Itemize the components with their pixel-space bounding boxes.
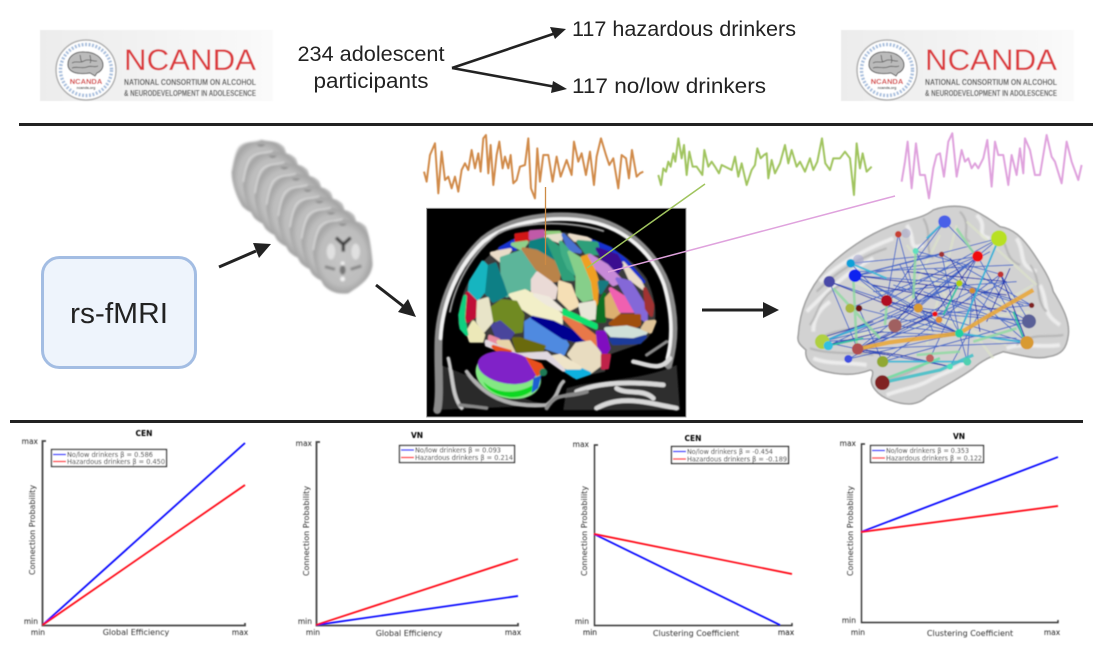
legend: Hazardous drinkers β = 0.450 (67, 458, 165, 466)
legend (400, 446, 514, 462)
MRI background (427, 208, 686, 417)
legend: No/low drinkers β = -0.454 (687, 448, 773, 456)
chart 3: CEN clustering coefficient: min (583, 628, 597, 637)
legend: No/low drinkers β = 0.353 (886, 447, 969, 455)
chart 3: CEN clustering coefficient: Clustering Coefficient (653, 629, 739, 638)
participants text (298, 43, 445, 93)
chart 4: VN clustering coefficient: VN (953, 432, 965, 441)
chart 3: CEN clustering coefficient: max (573, 440, 590, 449)
chart 4: VN clustering coefficient: min (842, 616, 856, 625)
chart 1: CEN global efficiency: Connection Probability (28, 485, 37, 575)
chart 2: VN global efficiency: min (306, 628, 320, 637)
arrow: fMRI to volumes (219, 243, 271, 267)
chart 2: VN global efficiency (296, 431, 522, 638)
time series: orange (424, 135, 643, 198)
legend (52, 450, 166, 466)
head skull outline (435, 216, 680, 410)
network edges (822, 222, 1032, 367)
arrow: volumes to parcellation (376, 285, 416, 317)
chart 3: CEN clustering coefficient: min (575, 617, 589, 626)
group label: no/low drinkers: 117 no/low drinkers (572, 75, 766, 98)
chart 3: CEN clustering coefficient (573, 434, 795, 638)
connector: orange (544, 187, 546, 265)
legend: Hazardous drinkers β = 0.122 (886, 454, 982, 462)
legend: Hazardous drinkers β = 0.214 (415, 454, 514, 462)
legend (870, 446, 984, 462)
fMRI volume stack (232, 140, 373, 294)
connector: pink (608, 196, 895, 272)
gyri shading (807, 212, 1063, 395)
chart 2: VN global efficiency: min (298, 617, 312, 626)
parcellated brain MRI (427, 208, 686, 417)
chart 4: VN clustering coefficient: max (840, 439, 857, 448)
right NCANDA logo (841, 30, 1074, 101)
chart 4: VN clustering coefficient: min (851, 628, 865, 637)
chart 1: CEN global efficiency: max (232, 628, 249, 637)
brain connectome network (798, 206, 1069, 404)
legend (672, 446, 788, 464)
chart 4: VN clustering coefficient: Clustering Coefficient (927, 629, 1013, 638)
chart 1: CEN global efficiency: min (24, 617, 38, 626)
chart 1: CEN global efficiency (22, 429, 249, 637)
cortical parcels (458, 231, 655, 378)
legend: No/low drinkers β = 0.093 (415, 446, 501, 454)
chart 2: VN global efficiency: max (505, 628, 522, 637)
connector: green (587, 184, 705, 268)
brain silhouette (798, 206, 1069, 404)
rs-fMRI box (42, 258, 196, 368)
chart 2: VN global efficiency: VN (411, 431, 423, 440)
legend: No/low drinkers β = 0.586 (67, 451, 154, 459)
arrow: parcellation to network (702, 302, 779, 318)
arrows: split into groups (452, 27, 567, 93)
chart 1: CEN global efficiency: Global Efficiency (103, 628, 170, 637)
group label: hazardous drinkers: 117 hazardous drinkers (572, 18, 796, 41)
legend: Hazardous drinkers β = -0.189 (687, 455, 787, 463)
chart 4: VN clustering coefficient: Connection Probability (846, 486, 855, 576)
translucent overlay fibres (827, 222, 1037, 358)
time series: pink (902, 133, 1082, 198)
chart 2: VN global efficiency: Connection Probability (302, 486, 311, 576)
chart 1: CEN global efficiency: max (22, 437, 39, 446)
time series: green (658, 138, 872, 195)
chart 3: CEN clustering coefficient: max (778, 628, 795, 637)
chart 2: VN global efficiency: Global Efficiency (376, 629, 443, 638)
chart 4: VN clustering coefficient: max (1044, 628, 1061, 637)
network nodes (815, 215, 1036, 390)
participants text: 234 adolescent (298, 43, 445, 66)
chart 1: CEN global efficiency: CEN (136, 429, 152, 438)
chart 4: VN clustering coefficient (840, 432, 1061, 638)
cerebellum (470, 345, 547, 406)
chart 3: CEN clustering coefficient: Connection Probability (580, 486, 589, 576)
chart 3: CEN clustering coefficient: CEN (685, 434, 701, 443)
rs-fMRI box: rs-fMRI (70, 298, 168, 330)
chart 2: VN global efficiency: max (296, 439, 313, 448)
left NCANDA logo (40, 30, 273, 101)
chart 1: CEN global efficiency: min (31, 628, 45, 637)
participants text: participants (314, 70, 428, 93)
